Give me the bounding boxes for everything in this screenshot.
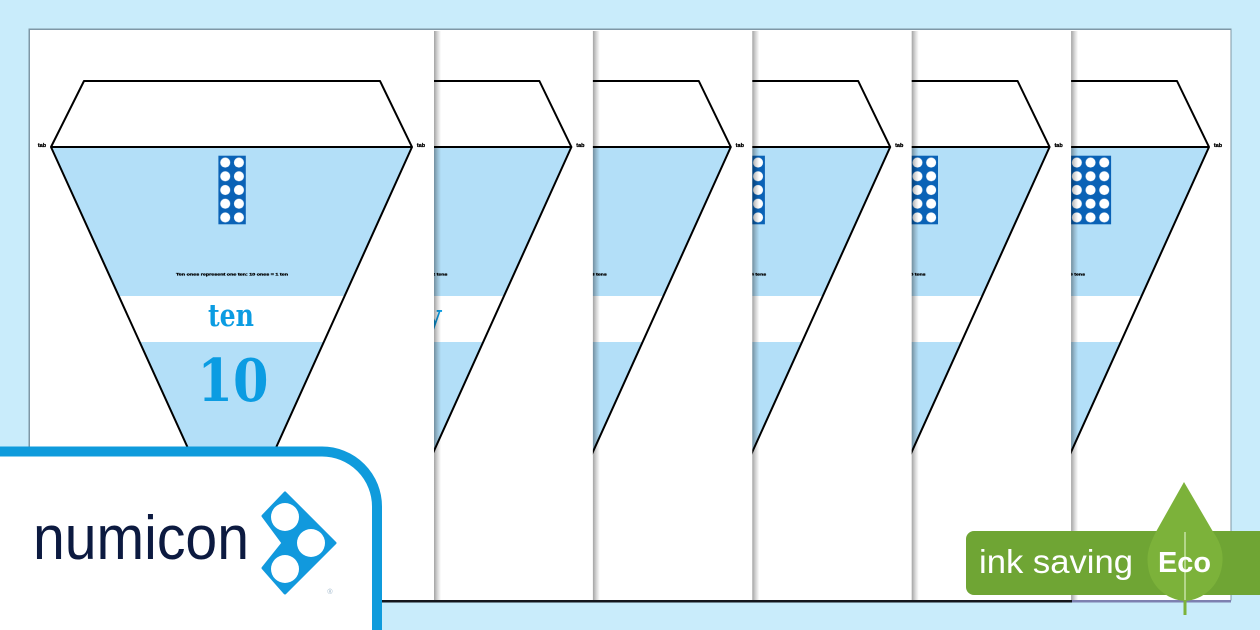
bunting page: sixty: tab bbox=[1214, 143, 1223, 149]
bunting page: forty: Ten ones represent one ten: 40 ones = 4 tens bbox=[654, 272, 766, 276]
logo mark bbox=[263, 493, 335, 593]
bunting page: twenty: tab bbox=[197, 143, 206, 149]
numicon logo panel bbox=[0, 452, 377, 630]
bunting page: fifty: 50 bbox=[835, 346, 906, 415]
bunting page: fifty: fifty bbox=[836, 298, 903, 334]
bottom page shadow bbox=[30, 600, 1072, 602]
white word band bbox=[118, 296, 345, 342]
bunting page: sixty: tab bbox=[835, 143, 844, 149]
bunting page: thirty: tab bbox=[736, 143, 745, 149]
bunting page: thirty bbox=[349, 30, 759, 600]
bunting page: sixty: sixty bbox=[993, 298, 1064, 334]
bunting page: thirty: 30 bbox=[516, 346, 587, 415]
bunting page: ten bbox=[30, 30, 441, 600]
registered mark: ® bbox=[327, 588, 333, 596]
ink saving text: ink saving bbox=[979, 543, 1133, 580]
ink saving eco badge bbox=[966, 482, 1260, 615]
bunting page: twenty: tab bbox=[576, 143, 585, 149]
bunting page: sixty: 60 bbox=[994, 346, 1066, 415]
eco text: Eco bbox=[1158, 547, 1211, 579]
bunting page: fifty bbox=[668, 30, 1078, 600]
bunting page: forty: tab bbox=[516, 143, 525, 149]
word: ten: ten bbox=[208, 298, 254, 334]
bunting page: forty: tab bbox=[895, 143, 904, 149]
bunting page: forty bbox=[508, 30, 919, 600]
bunting page: forty: forty bbox=[673, 298, 746, 334]
bunting page: fifty: tab bbox=[1054, 143, 1063, 149]
bunting page: sixty bbox=[827, 30, 1230, 600]
bunting page: twenty: 20 bbox=[357, 346, 428, 415]
fold line bbox=[51, 146, 412, 148]
bunting page: thirty: thirty bbox=[510, 298, 591, 334]
leaf bbox=[1147, 482, 1223, 601]
bunting page: fifty: tab bbox=[675, 143, 684, 149]
leaf vein bbox=[1184, 532, 1186, 600]
green bar bbox=[966, 531, 1260, 595]
page shadow bbox=[434, 31, 441, 600]
pennant outline bbox=[51, 81, 412, 545]
bunting page: twenty: Ten ones represent one ten: 20 ones = 2 tens bbox=[335, 272, 447, 276]
caption: Ten ones represent one ten: 10 ones = 1 ten bbox=[176, 272, 289, 276]
bunting page: thirty: Ten ones represent one ten: 30 ones = 3 tens bbox=[495, 272, 607, 276]
bunting page: fifty: Ten ones represent one ten: 50 ones = 5 tens bbox=[814, 272, 926, 276]
panel border bbox=[0, 452, 377, 630]
leaf stem bbox=[1184, 600, 1186, 615]
numicon ten plate bbox=[218, 156, 246, 224]
bunting page: sixty: Ten ones represent one ten: 60 ones = 6 tens bbox=[973, 272, 1085, 276]
bunting page: thirty: tab bbox=[357, 143, 366, 149]
left tab label: tab bbox=[38, 143, 47, 149]
bunting page: forty: 40 bbox=[676, 346, 747, 415]
right tab label: tab bbox=[417, 143, 426, 149]
blue pennant bbox=[51, 147, 412, 545]
bottom shadow of last page bbox=[1072, 600, 1231, 602]
bunting page: twenty bbox=[189, 30, 600, 600]
number: 10: 10 bbox=[198, 346, 268, 415]
bunting page: twenty: twenty bbox=[339, 298, 442, 334]
logo wordmark: numicon bbox=[33, 504, 249, 573]
